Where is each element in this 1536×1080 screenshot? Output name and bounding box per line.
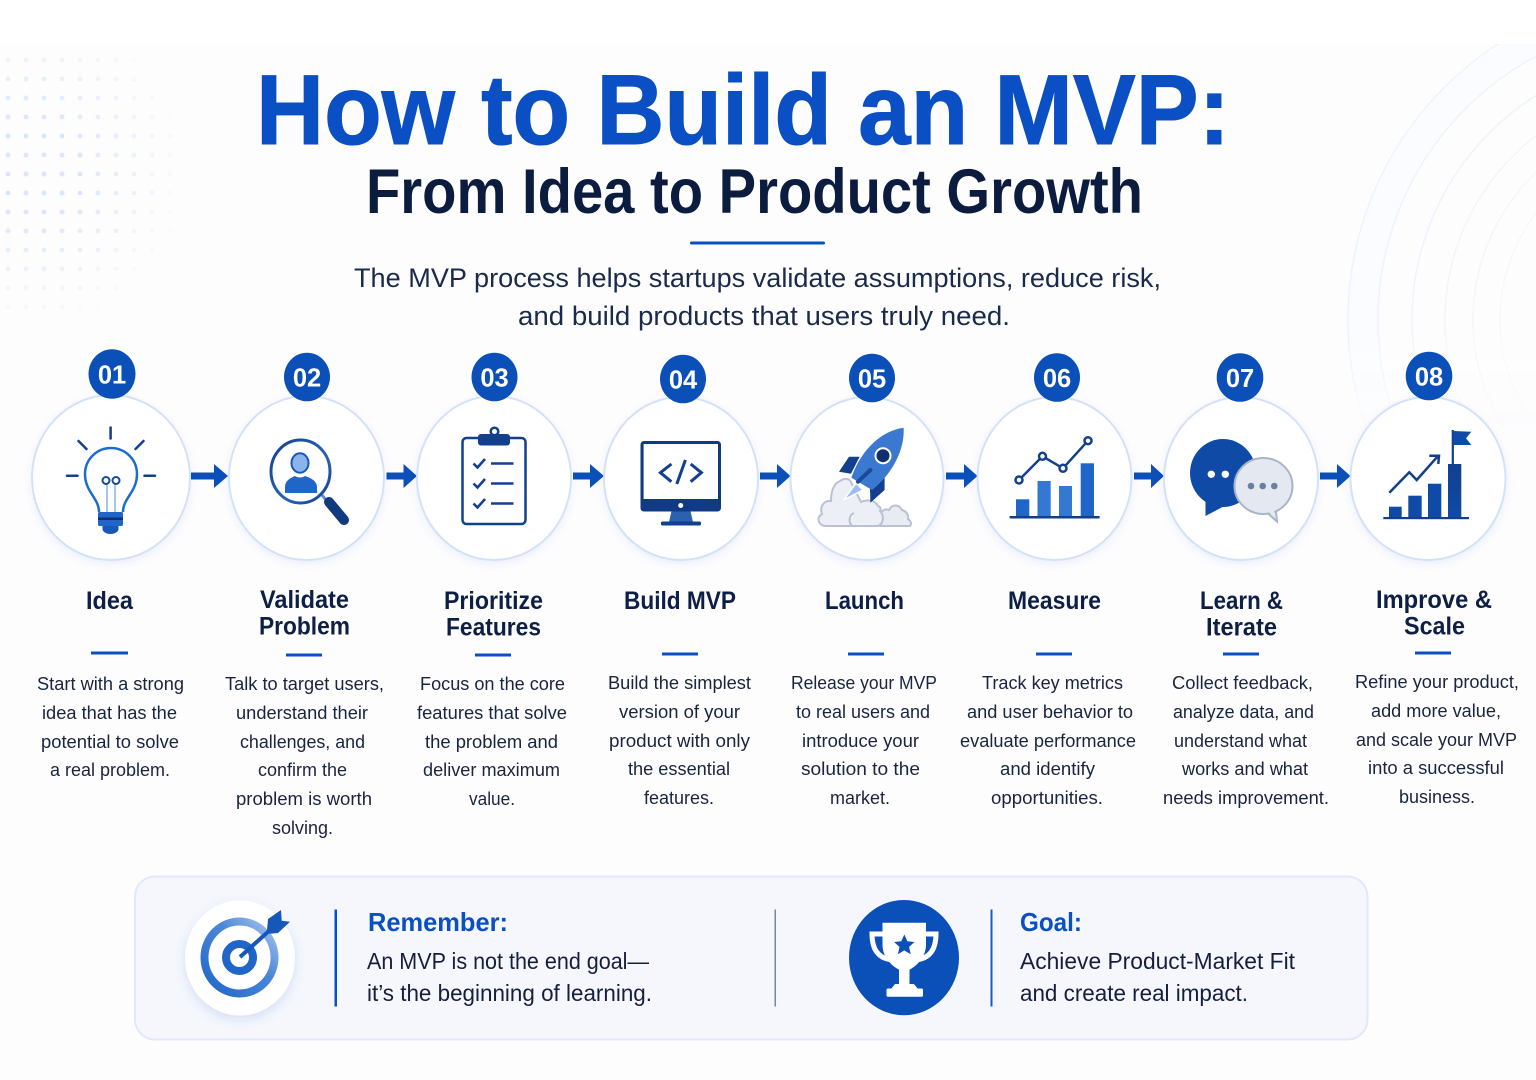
heading <box>259 586 350 640</box>
description: features that solve <box>417 703 567 723</box>
description: and user behavior to <box>967 702 1133 722</box>
icon: chat bubbles <box>1190 439 1292 522</box>
circle <box>229 396 384 560</box>
icon: light bulb <box>67 428 155 534</box>
number badge 06: 06 <box>1043 365 1071 393</box>
step 03: Prioritize Features <box>417 353 571 809</box>
number badge 07 <box>1217 353 1263 402</box>
icon: monitor with code <box>640 441 721 526</box>
description: understand their <box>236 703 368 723</box>
number badge 02 <box>284 353 330 401</box>
description: problem is worth <box>236 789 372 809</box>
circle <box>1164 397 1318 560</box>
goal text: and create real impact. <box>1020 980 1248 1006</box>
arrow: 03 to 04 <box>573 464 604 488</box>
arrow: 05 to 06 <box>946 464 978 488</box>
panel: remember and goal <box>135 876 1368 1040</box>
circle <box>32 395 190 560</box>
icon: growth chart with flag <box>1383 430 1471 519</box>
number badge 07: 07 <box>1226 365 1254 393</box>
description: the problem and <box>425 732 558 752</box>
circle <box>790 397 944 560</box>
description: and identify <box>1000 759 1095 779</box>
icon: bar and line chart <box>1010 437 1100 518</box>
description: Start with a strong <box>37 674 184 694</box>
number badge 04: 04 <box>669 366 698 394</box>
description: Talk to target users, <box>225 674 384 694</box>
heading: Iterate <box>1206 614 1277 642</box>
heading: Problem <box>259 612 350 640</box>
heading: Prioritize <box>444 587 543 615</box>
remember text: Remember: <box>368 907 508 937</box>
circle <box>417 396 571 560</box>
heading: Learn & <box>1200 587 1283 615</box>
description: add more value, <box>1371 701 1501 721</box>
description: deliver maximum <box>423 760 560 780</box>
number badge 08: 08 <box>1415 364 1443 392</box>
arrow: 07 to 08 <box>1320 464 1350 488</box>
description: Release your MVP <box>791 673 937 693</box>
description: introduce your <box>802 731 919 751</box>
number badge 04 <box>660 355 706 403</box>
description: into a successful <box>1368 758 1504 778</box>
heading: Launch <box>825 587 904 615</box>
description <box>791 673 937 808</box>
description: Build the simplest <box>608 673 751 693</box>
description: Refine your product, <box>1355 672 1519 692</box>
description <box>225 674 384 838</box>
icon: target with arrow <box>185 900 295 1016</box>
heading: Idea <box>86 587 134 615</box>
number badge 03 <box>472 353 518 401</box>
description: understand what <box>1174 731 1307 751</box>
number badge 05 <box>849 354 895 402</box>
step 06: Measure <box>960 353 1136 808</box>
circle <box>978 397 1132 560</box>
step 04: Build MVP <box>604 355 758 808</box>
description <box>960 673 1136 808</box>
intro text: The MVP process helps startups validate assumptions, reduce risk, <box>354 263 1161 293</box>
description: solution to the <box>801 759 920 779</box>
heading: Improve & <box>1376 586 1492 614</box>
intro text: and build products that users truly need. <box>518 301 1010 331</box>
description: opportunities. <box>991 788 1103 808</box>
description <box>417 674 567 809</box>
number badge 08 <box>1406 352 1452 400</box>
icon: trophy <box>849 900 959 1015</box>
number badge 05: 05 <box>858 366 886 394</box>
description: market. <box>830 788 890 808</box>
description: Collect feedback, <box>1172 673 1313 693</box>
description <box>37 674 184 780</box>
heading: Measure <box>1008 587 1101 615</box>
heading <box>1200 587 1283 642</box>
description: idea that has the <box>42 703 177 723</box>
description: value. <box>469 789 515 809</box>
description: solving. <box>272 818 333 838</box>
heading: Scale <box>1404 612 1465 640</box>
description: version of your <box>619 702 740 722</box>
circle <box>604 397 758 560</box>
arrow: 06 to 07 <box>1134 464 1164 488</box>
heading: Features <box>446 614 541 642</box>
description <box>1355 672 1519 807</box>
subtitle: From Idea to Product Growth <box>366 157 1143 227</box>
icon: magnifier with user <box>271 440 344 520</box>
heading <box>1376 586 1492 640</box>
number badge 01: 01 <box>98 362 126 390</box>
step 02: Validate Problem <box>225 353 384 838</box>
goal text: Achieve Product-Market Fit <box>1020 948 1296 974</box>
description: evaluate performance <box>960 731 1136 751</box>
intro text <box>354 263 1161 331</box>
number badge 03: 03 <box>480 364 509 392</box>
description: product with only <box>609 731 750 751</box>
description: confirm the <box>258 760 347 780</box>
description <box>608 673 751 808</box>
number badge 02: 02 <box>293 364 321 392</box>
goal text <box>1020 907 1296 1006</box>
icon: clipboard checklist <box>462 428 526 524</box>
heading: Build MVP <box>624 587 736 615</box>
circle <box>1350 397 1506 560</box>
description: to real users and <box>796 702 930 722</box>
description: features. <box>644 788 714 808</box>
description: the essential <box>628 759 730 779</box>
icon: rocket with clouds <box>819 428 911 526</box>
description: Focus on the core <box>420 674 565 694</box>
step 08: Improve & Scale <box>1350 352 1519 807</box>
description: needs improvement. <box>1163 788 1329 808</box>
heading: Validate <box>260 586 349 614</box>
number badge 01 <box>88 349 136 399</box>
description: challenges, and <box>240 732 365 752</box>
description <box>1163 673 1329 808</box>
heading <box>444 587 543 642</box>
title: How to Build an MVP: <box>256 54 1230 165</box>
remember text: it’s the beginning of learning. <box>367 980 652 1006</box>
description: and scale your MVP <box>1356 730 1517 750</box>
remember text: An MVP is not the end goal— <box>367 948 649 974</box>
number badge 06 <box>1034 353 1080 402</box>
step 05: Launch <box>790 354 944 808</box>
step 07: Learn & Iterate <box>1163 353 1329 808</box>
description: Track key metrics <box>982 673 1123 693</box>
step 01: Idea <box>32 349 190 780</box>
arrow: 04 to 05 <box>760 464 790 488</box>
remember text <box>367 907 652 1006</box>
description: works and what <box>1181 759 1308 779</box>
description: potential to solve <box>41 732 179 752</box>
arrow: 02 to 03 <box>386 464 417 488</box>
description: a real problem. <box>50 760 170 780</box>
arrow: 01 to 02 <box>191 464 228 488</box>
description: analyze data, and <box>1173 702 1314 722</box>
description: business. <box>1399 787 1475 807</box>
goal text: Goal: <box>1020 907 1082 937</box>
